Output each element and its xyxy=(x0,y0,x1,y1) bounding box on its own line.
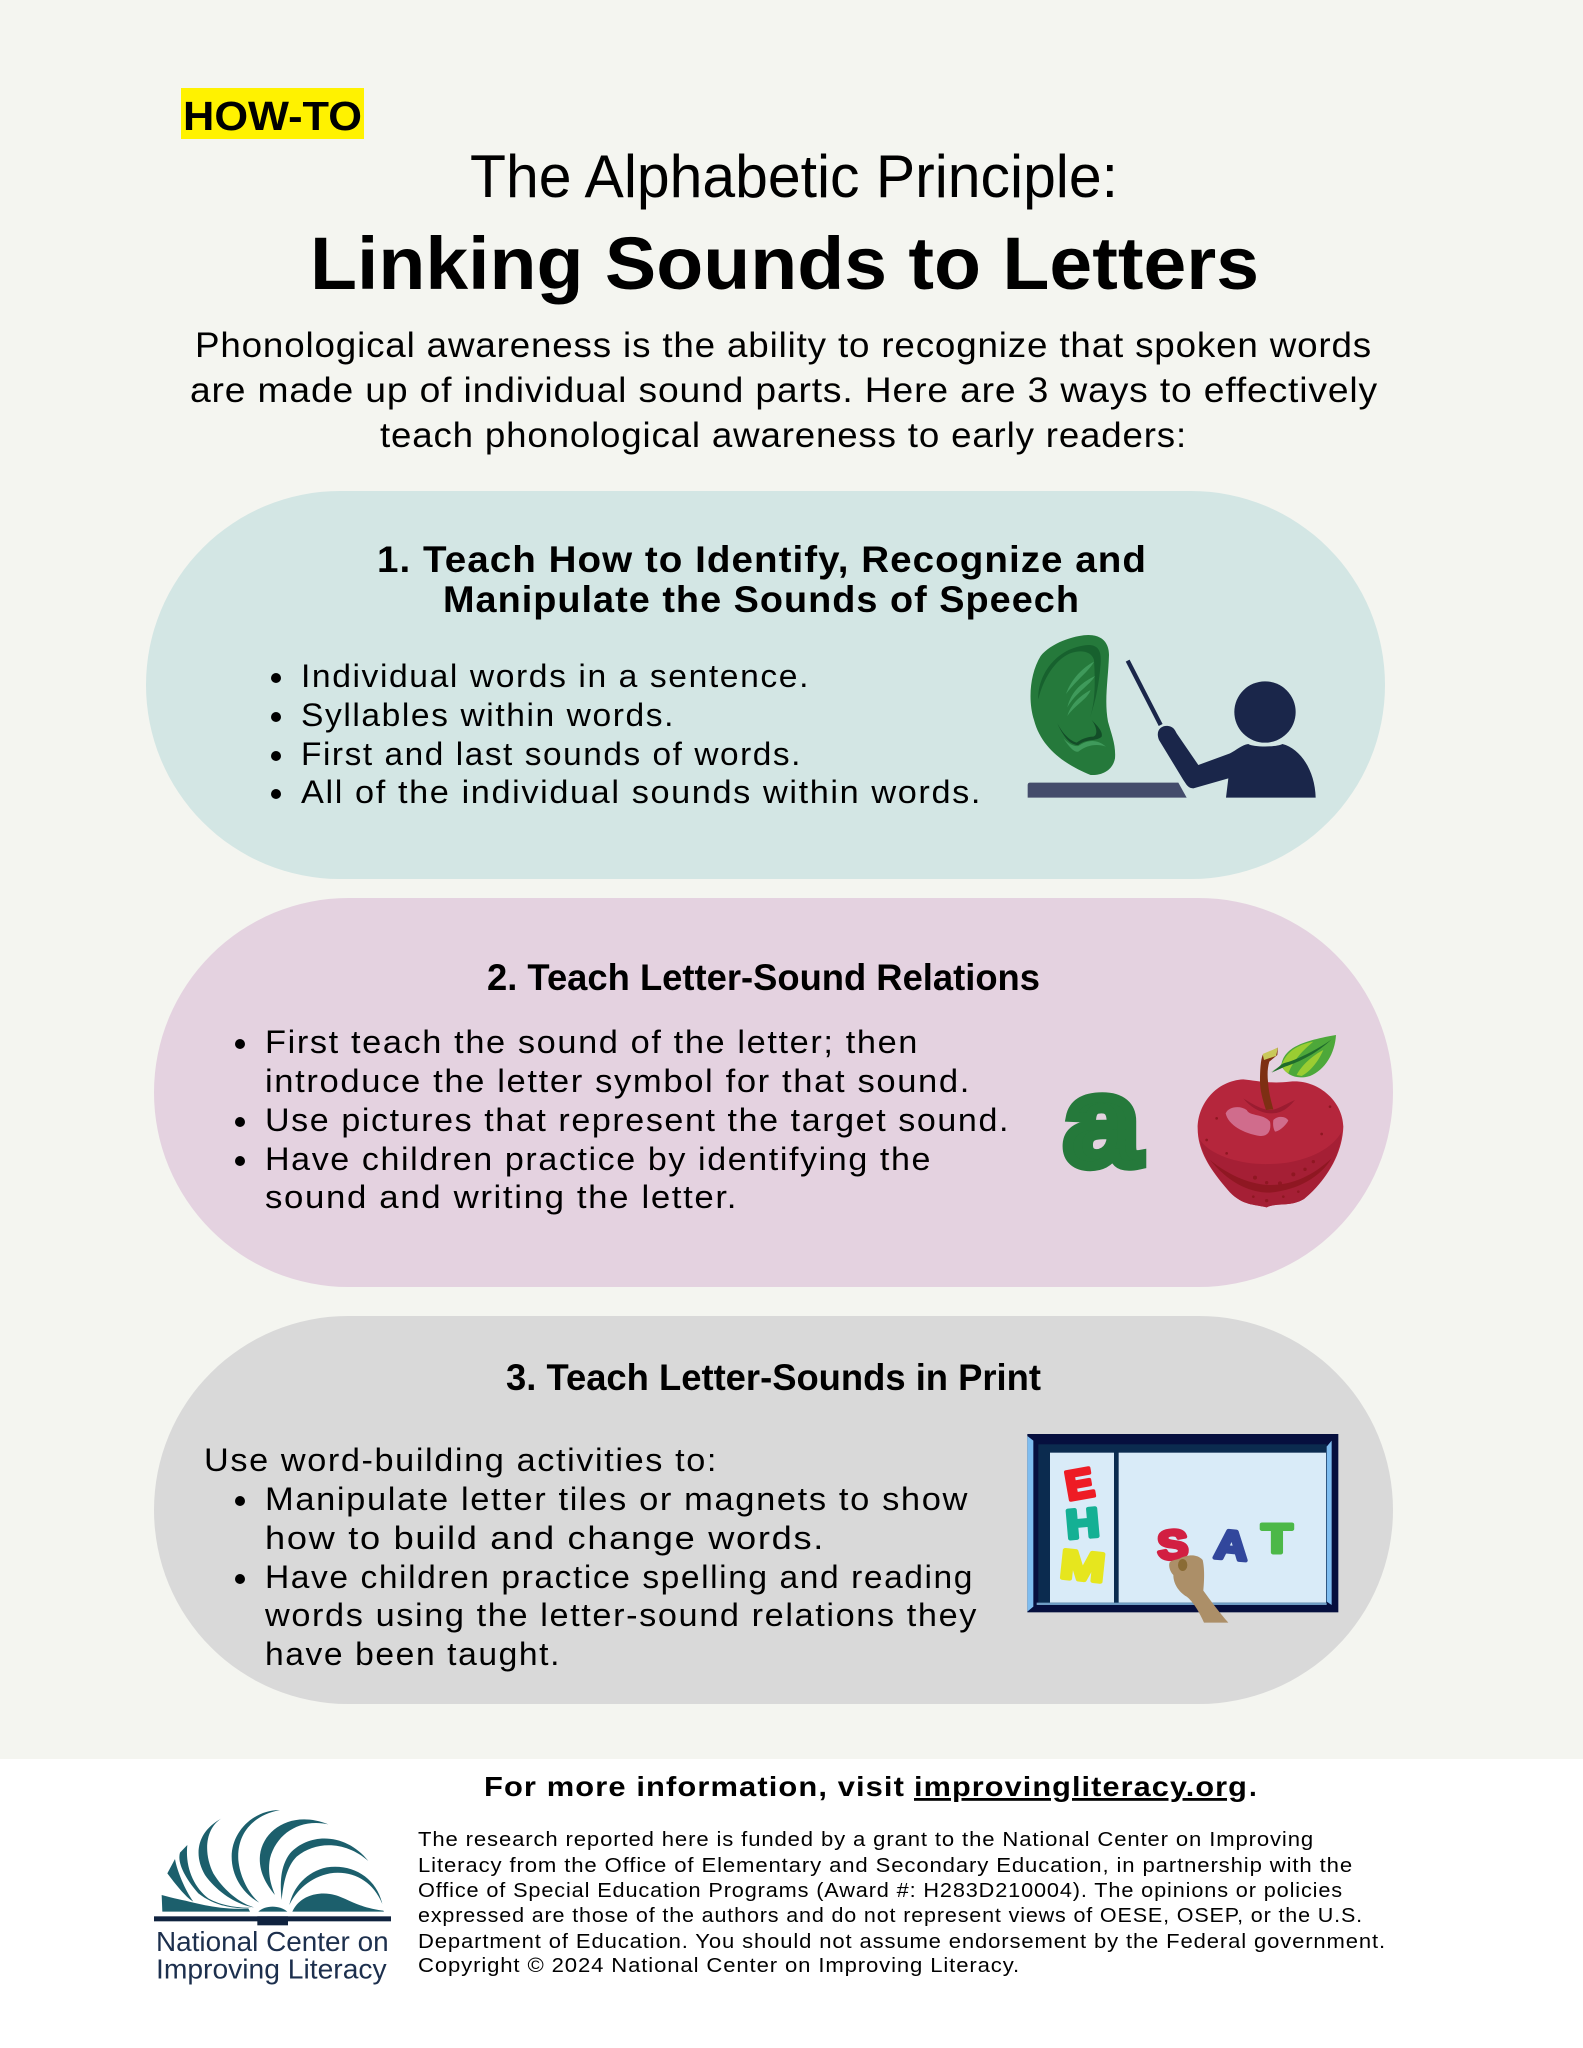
bullet list: step 2: sound and writing the letter. xyxy=(265,1179,738,1215)
funding disclaimer: The research reported here is funded by a grant to the National Center on Improving xyxy=(418,1829,1314,1851)
funding disclaimer: Department of Education. You should not assume endorsement by the Federal government. xyxy=(418,1931,1386,1953)
bullet list: step 2: First teach the sound of the letter; then xyxy=(265,1024,919,1060)
title xyxy=(310,143,1259,305)
bullet list: step 1: Individual words in a sentence. xyxy=(301,658,810,694)
footer link line xyxy=(484,1771,1257,1802)
logo: National Center on Improving Literacy xyxy=(154,1810,391,1984)
heading: step 2: 2. Teach Letter-Sound Relations xyxy=(487,957,1040,998)
bullet list: step 2: Use pictures that represent the target sound. xyxy=(265,1102,1010,1138)
icon: magnetic letter board: T xyxy=(1262,1516,1293,1562)
funding disclaimer: Copyright © 2024 National Center on Improving Literacy. xyxy=(418,1955,1020,1977)
body text: step 3: Manipulate letter tiles or magnets to show xyxy=(265,1481,969,1517)
logo: National Center on Improving Literacy: National Center on xyxy=(156,1926,389,1957)
footer band xyxy=(0,1759,1583,2048)
bullet list: step 2: Have children practice by identifying the xyxy=(265,1141,932,1177)
icon: magnetic letter board: M xyxy=(1058,1541,1107,1591)
icon: ear and teacher with pointer xyxy=(1028,635,1316,798)
badge: HOW-TO: HOW-TO xyxy=(183,93,362,139)
funding disclaimer xyxy=(418,1829,1386,1977)
bullet list: step 1: All of the individual sounds within words. xyxy=(301,774,982,810)
footer link line: improvingliteracy.org xyxy=(914,1771,1248,1802)
heading: step 1: 1. Teach How to Identify, Recognize and xyxy=(377,539,1147,580)
bullet list: step 2 xyxy=(235,1024,1010,1215)
funding disclaimer: expressed are those of the authors and do not represent views of OESE, OSEP, or the U.S. xyxy=(418,1905,1363,1927)
body text: step 3: Use word-building activities to: xyxy=(204,1442,718,1478)
intro text xyxy=(190,326,1378,455)
body text: step 3 xyxy=(204,1442,978,1672)
heading: step 3: 3. Teach Letter-Sounds in Print xyxy=(506,1357,1041,1398)
panel: step 3 xyxy=(154,1316,1393,1704)
panel: step 1 xyxy=(146,491,1385,879)
icon: apple xyxy=(1198,1035,1343,1207)
icon: magnetic letter board: A xyxy=(1213,1521,1250,1570)
body text: step 3: Have children practice spelling and reading xyxy=(265,1559,974,1595)
icon: magnetic letter board: E xyxy=(1062,1459,1097,1509)
body text: step 3: words using the letter-sound relations they xyxy=(264,1597,978,1633)
bullet list: step 1: Syllables within words. xyxy=(301,697,675,733)
bullet list: step 1 xyxy=(271,658,982,810)
bullet list: step 2: introduce the letter symbol for that sound. xyxy=(265,1063,971,1099)
icon: letter a: a xyxy=(1064,1051,1141,1192)
heading: step 1: Manipulate the Sounds of Speech xyxy=(443,579,1080,620)
funding disclaimer: Literacy from the Office of Elementary and Secondary Education, in partnership with the xyxy=(418,1855,1353,1877)
body text: step 3: have been taught. xyxy=(265,1636,561,1672)
intro text: are made up of individual sound parts. Here are 3 ways to effectively xyxy=(190,371,1378,410)
title: Linking Sounds to Letters xyxy=(310,222,1259,305)
heading: step 1 xyxy=(377,539,1147,620)
icon: magnetic letter board xyxy=(1027,1434,1338,1623)
intro text: teach phonological awareness to early readers: xyxy=(380,416,1187,455)
logo: National Center on Improving Literacy: Improving Literacy xyxy=(156,1953,387,1984)
panel: step 2 xyxy=(154,898,1393,1287)
funding disclaimer: Office of Special Education Programs (Award #: H283D210004). The opinions or policies xyxy=(418,1880,1343,1902)
footer link line: . xyxy=(1249,1771,1257,1802)
icon: magnetic letter board: H xyxy=(1064,1499,1101,1548)
footer link line: For more information, visit xyxy=(484,1771,905,1802)
bullet list: step 1: First and last sounds of words. xyxy=(301,736,802,772)
intro text: Phonological awareness is the ability to recognize that spoken words xyxy=(195,326,1372,365)
title: The Alphabetic Principle: xyxy=(470,143,1118,210)
icon: magnetic letter board: S xyxy=(1156,1521,1189,1568)
body text: step 3: how to build and change words. xyxy=(265,1520,825,1556)
